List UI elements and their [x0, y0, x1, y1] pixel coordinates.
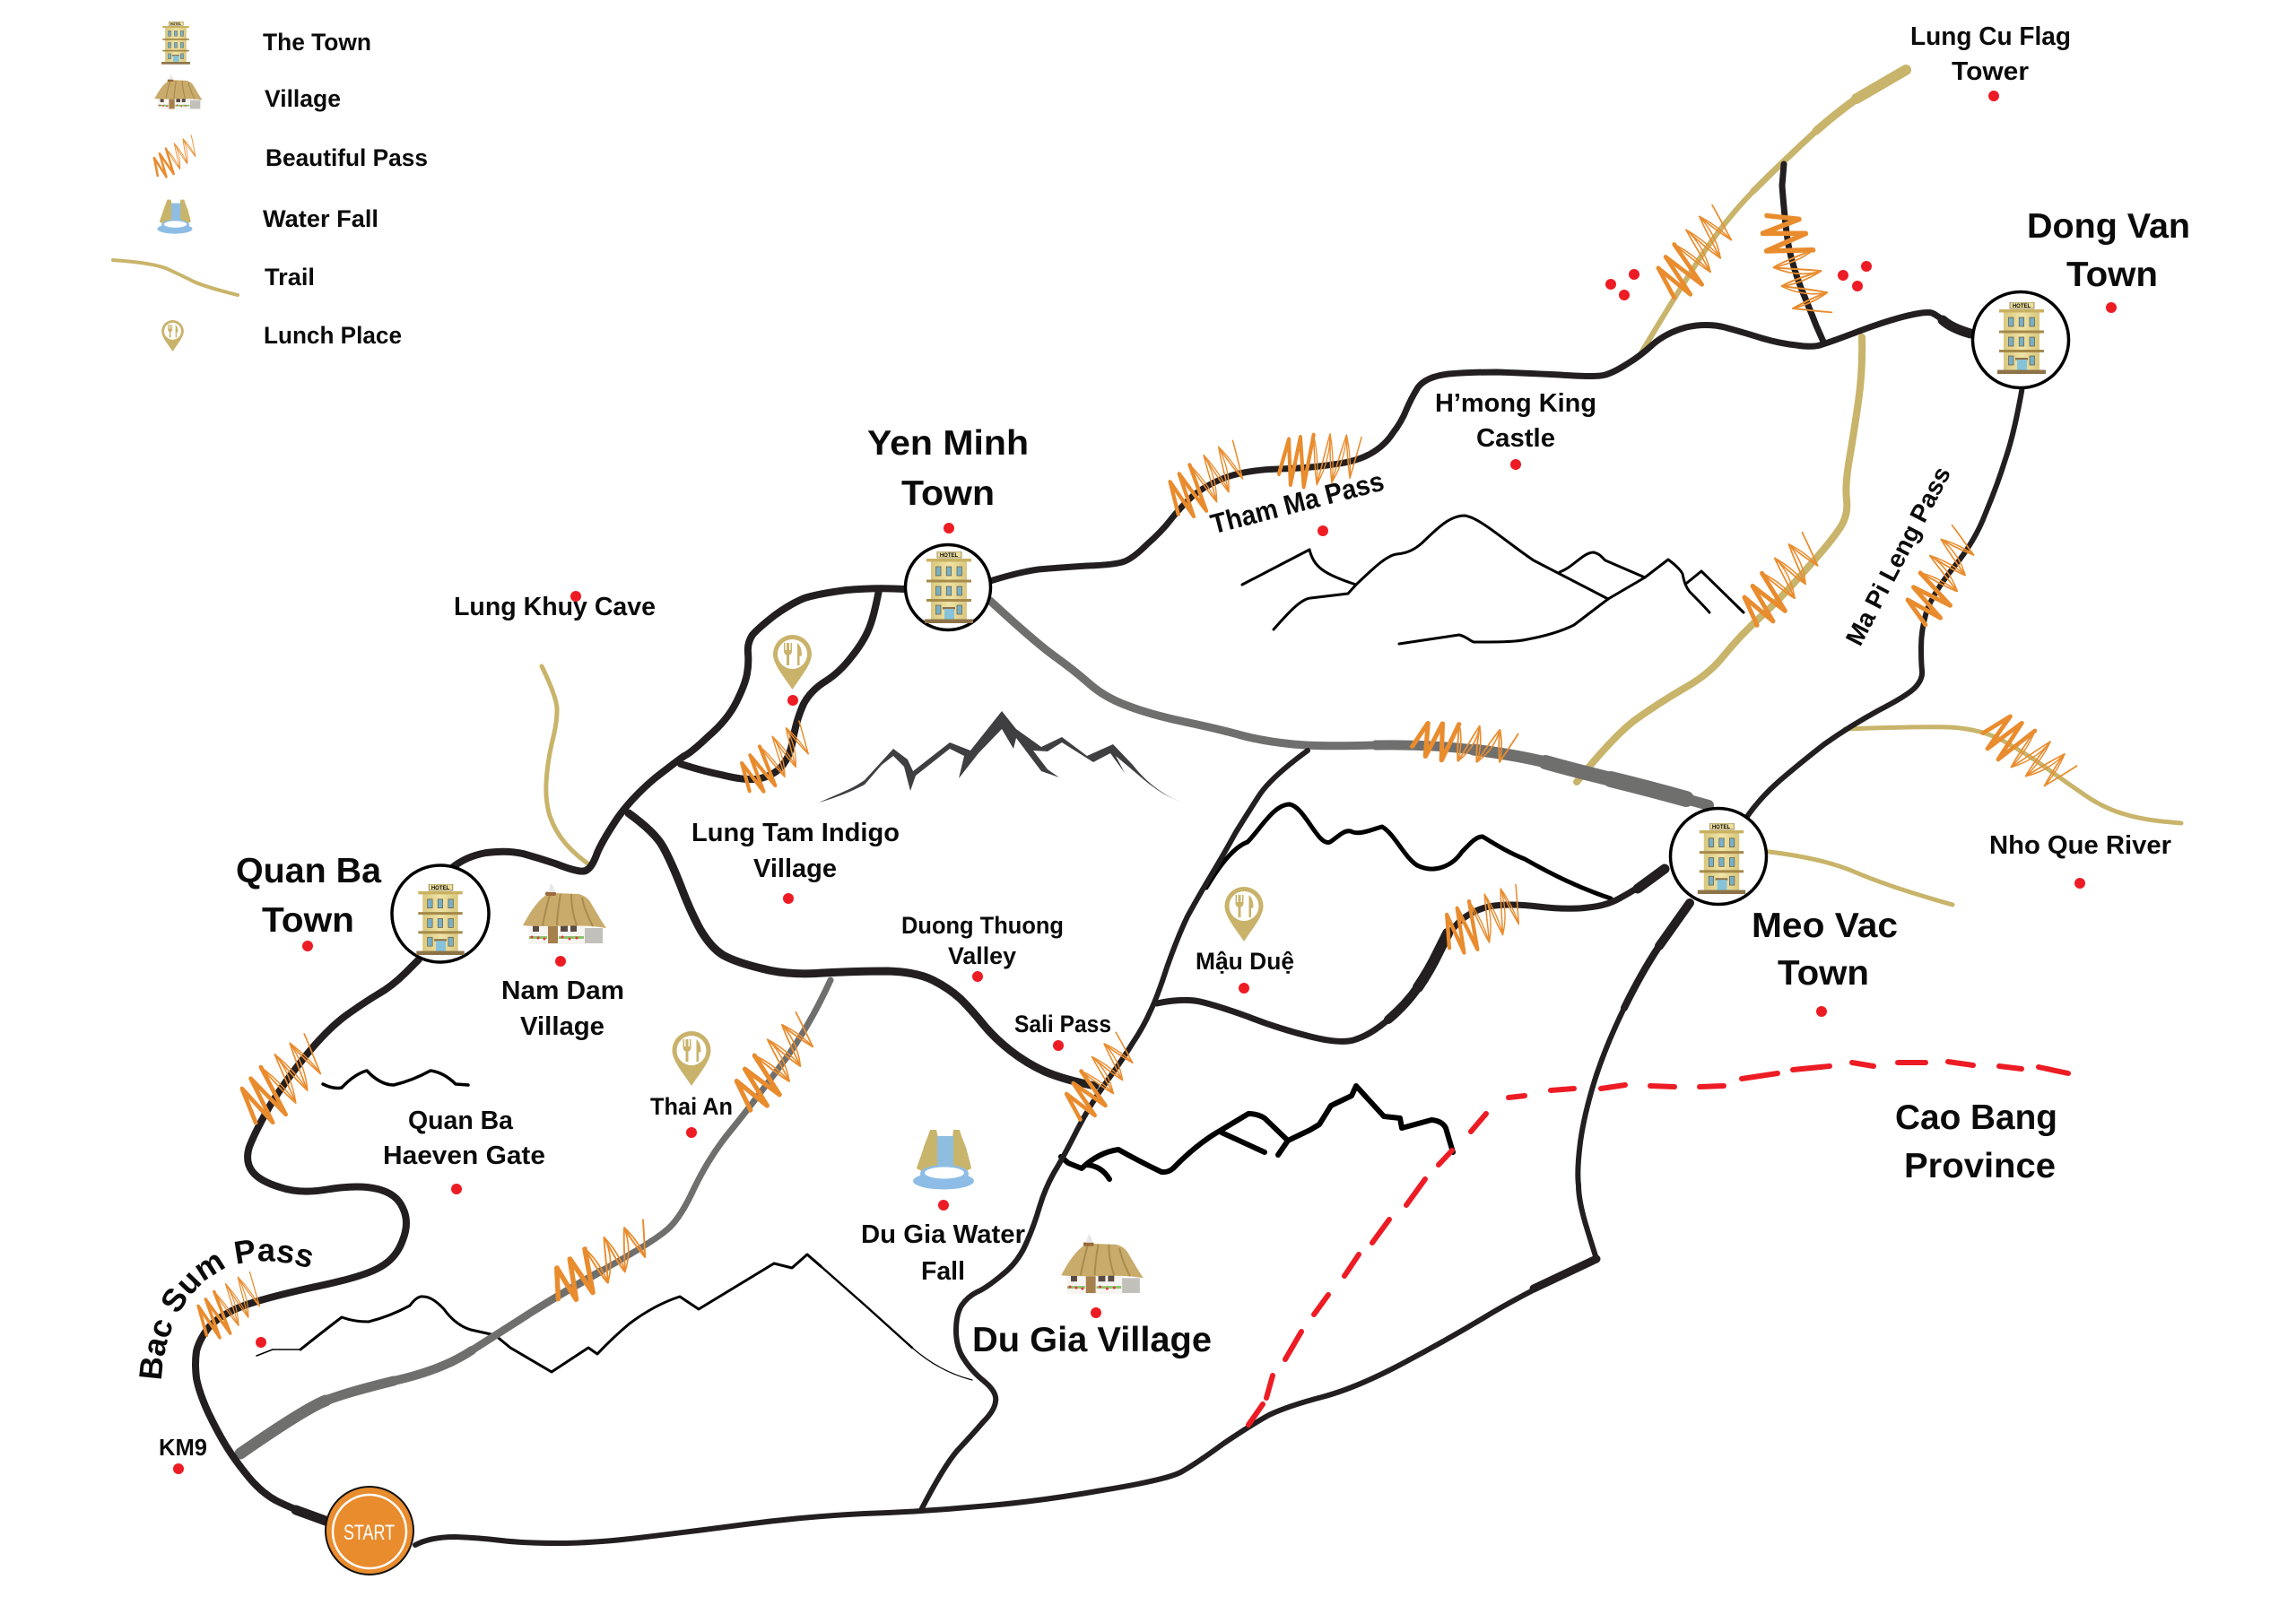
icon: Quan Ba town [392, 865, 489, 962]
pass: southern gray road 2 [725, 1011, 828, 1118]
label: Meo Vac Town: Town [1778, 954, 1869, 993]
mountain: Quan Ba wave [323, 1071, 468, 1089]
beautiful pass markers [189, 204, 2079, 1344]
pass: Sali [1057, 1030, 1146, 1126]
label: Bac Sum Pass: Bac Sum Pass [139, 1240, 312, 1379]
legend icon: town [161, 22, 190, 65]
gray road: KM9 to Sali [240, 980, 831, 1454]
label: Lung Cu Flag Tower [1910, 22, 2071, 86]
pass: Nho Que [1976, 706, 2079, 800]
icon: Nam Dam village [523, 883, 606, 944]
road: Lung Cu branch [1782, 164, 1823, 342]
trail: Lung Khuy Cave [542, 666, 590, 865]
label: Ma Pi Leng Pass: Ma Pi Leng Pass [1840, 462, 1956, 650]
label: Dong Van Town: Dong Van [2027, 207, 2190, 246]
legend icon: water fall [158, 200, 192, 234]
icon: Yen Minh town: HOTEL [940, 553, 958, 559]
icon: lunch Lung Tam [773, 635, 812, 690]
icon: Meo Vac town [1670, 809, 1767, 904]
label: Cao Bang Province: Province [1904, 1147, 2056, 1185]
pass: Mau Due road [1436, 882, 1533, 959]
label: Quan Ba Haeven Gate: Quan Ba [408, 1107, 514, 1135]
label: Quan Ba Haeven Gate: Haeven Gate [383, 1141, 545, 1170]
label: Lung Cu Flag Tower: Tower [1952, 57, 2029, 86]
legend icon: village [154, 74, 203, 109]
label: Meo Vac Town [1752, 907, 1898, 993]
mountain: Yen Minh dark range [819, 711, 1182, 803]
pass: Tham Ma right [1279, 434, 1361, 487]
black roads [196, 164, 2022, 1545]
label: Dong Van Town: Town [2066, 256, 2158, 294]
road: Dong Van to Meo Vac [1746, 386, 2022, 818]
icon: Du Gia waterfall [913, 1130, 974, 1189]
pass: northern gray road [1411, 717, 1518, 770]
icon: Start marker: START [344, 1521, 395, 1545]
label: Yen Minh Town: Town [901, 474, 995, 513]
legend label: Lunch Place: Lunch Place [264, 322, 402, 349]
road: Lung Tam branch [681, 590, 879, 779]
label: Quan Ba Town: Quan Ba [236, 852, 381, 890]
label: Quan Ba Haeven Gate [383, 1107, 545, 1170]
label: Dong Van Town [2027, 207, 2190, 294]
road: central line to Du Gia [922, 751, 1308, 1508]
pass: Lung Cu trail [1647, 204, 1746, 306]
trail: Nho Que River [1845, 727, 2181, 823]
mountain: Tham Ma range [1242, 516, 1744, 644]
label: Lung Tam Indigo Village [691, 819, 900, 883]
icon: Dong Van town [1973, 292, 2068, 387]
label: Duong Thuong Valley [901, 912, 1064, 969]
legend label: Trail: Trail [265, 264, 315, 291]
location dots [173, 91, 2117, 1474]
label: KM9: KM9 [159, 1434, 207, 1461]
legend icon: lunch place [161, 320, 184, 352]
legend label: Village: Village [265, 85, 341, 112]
legend label: Water Fall: Water Fall [263, 205, 378, 232]
label: Sali Pass: Sali Pass [1014, 1011, 1111, 1037]
label: H'mong King Castle: Castle [1476, 424, 1555, 453]
icon: Meo Vac town: HOTEL [1712, 825, 1730, 830]
label: Du Gia Water Fall: Du Gia Water [861, 1220, 1025, 1249]
label: Lung Tam Indigo Village: Lung Tam Indigo [691, 819, 900, 847]
road: Yen Minh to Dong Van [990, 312, 1973, 581]
pass: Lung Cu road [1756, 204, 1834, 325]
gray road: Yen Minh to Meo Vac [990, 601, 1709, 805]
icon: lunch Thai An [673, 1031, 710, 1086]
pass: southern gray road 1 [543, 1218, 662, 1309]
label: Du Gia Water Fall: Fall [921, 1257, 965, 1286]
label: Lung Tam Indigo Village: Village [753, 855, 837, 883]
trail routes [542, 70, 2181, 905]
pass: Lung Tam [732, 719, 822, 799]
trail: middle ridge [1577, 337, 1862, 782]
label: Mau Due: Mậu Duệ [1196, 948, 1294, 975]
legend icon: beautiful pass [148, 134, 204, 181]
trail: Meo Vac east [1761, 851, 1952, 905]
mountain: long southern range [257, 1254, 972, 1380]
icon: Du Gia village [1061, 1234, 1144, 1294]
icon: Yen Minh town [906, 545, 990, 629]
label: Nho Que River: Nho Que River [1989, 831, 2171, 860]
road: southern road from Start [415, 1259, 1596, 1545]
label: Thai An: Thai An [650, 1093, 733, 1120]
map labels [139, 22, 2190, 1461]
legend label: Beautiful Pass: Beautiful Pass [265, 144, 428, 171]
gray roads [240, 601, 1709, 1454]
label: Nam Dam Village: Village [520, 1012, 604, 1041]
label: Du Gia Village: Du Gia Village [972, 1321, 1212, 1359]
label: Quan Ba Town [236, 852, 381, 940]
border: Cao Bang Province dashed line [1248, 1062, 2068, 1425]
label: Meo Vac Town: Meo Vac [1752, 907, 1898, 945]
label: Quan Ba Town: Town [262, 901, 354, 940]
pass: Bac Sum upper [230, 1031, 336, 1133]
pass: Tham Ma left [1159, 438, 1257, 525]
label: Duong Thuong Valley: Duong Thuong [901, 912, 1064, 939]
label: Duong Thuong Valley: Valley [948, 942, 1016, 969]
label: Cao Bang Province: Cao Bang [1895, 1098, 2057, 1137]
icon: Dong Van town: HOTEL [2013, 304, 2031, 309]
label: Du Gia Water Fall [861, 1220, 1025, 1286]
mountains [257, 516, 1744, 1380]
label: H'mong King Castle [1435, 389, 1596, 453]
road: Quan Ba to Yen Minh [453, 588, 905, 872]
legend label: The Town: The Town [263, 29, 371, 56]
label: Lung Cu Flag Tower: Lung Cu Flag [1910, 22, 2071, 51]
label: Yen Minh Town [867, 424, 1029, 513]
trail: Lung Cu [1640, 70, 1906, 354]
road: Mau Due [1157, 869, 1665, 1041]
legend [113, 22, 428, 352]
icon: Start marker [326, 1487, 413, 1575]
road: Lung Tam to Sali Pass [629, 813, 1095, 1086]
road: Meo Vac south [1578, 903, 1690, 1259]
label: H'mong King Castle: H’mong King [1435, 389, 1596, 418]
label: Cao Bang Province [1895, 1098, 2057, 1185]
icon: lunch Mau Due [1225, 887, 1263, 942]
icon: Quan Ba town: HOTEL [431, 886, 449, 891]
legend icon: trail [113, 260, 238, 295]
label: Lung Khuy Cave: Lung Khuy Cave [454, 593, 656, 621]
label: Nam Dam Village [501, 976, 624, 1041]
label: Tham Ma Pass: Tham Ma Pass [1207, 465, 1387, 540]
label: Yen Minh Town: Yen Minh [867, 424, 1029, 463]
road: Start to Quan Ba [196, 959, 419, 1521]
mountain: Meo Vac range [1206, 804, 1611, 898]
pass: Ma Pi Leng [1898, 524, 1987, 630]
legend icon: town: HOTEL [170, 22, 182, 26]
mountain: Du Gia range [1061, 1086, 1453, 1179]
label: Nam Dam Village: Nam Dam [501, 976, 624, 1005]
pass: Bac Sum lower [189, 1270, 272, 1344]
pass: middle trail [1733, 531, 1832, 633]
